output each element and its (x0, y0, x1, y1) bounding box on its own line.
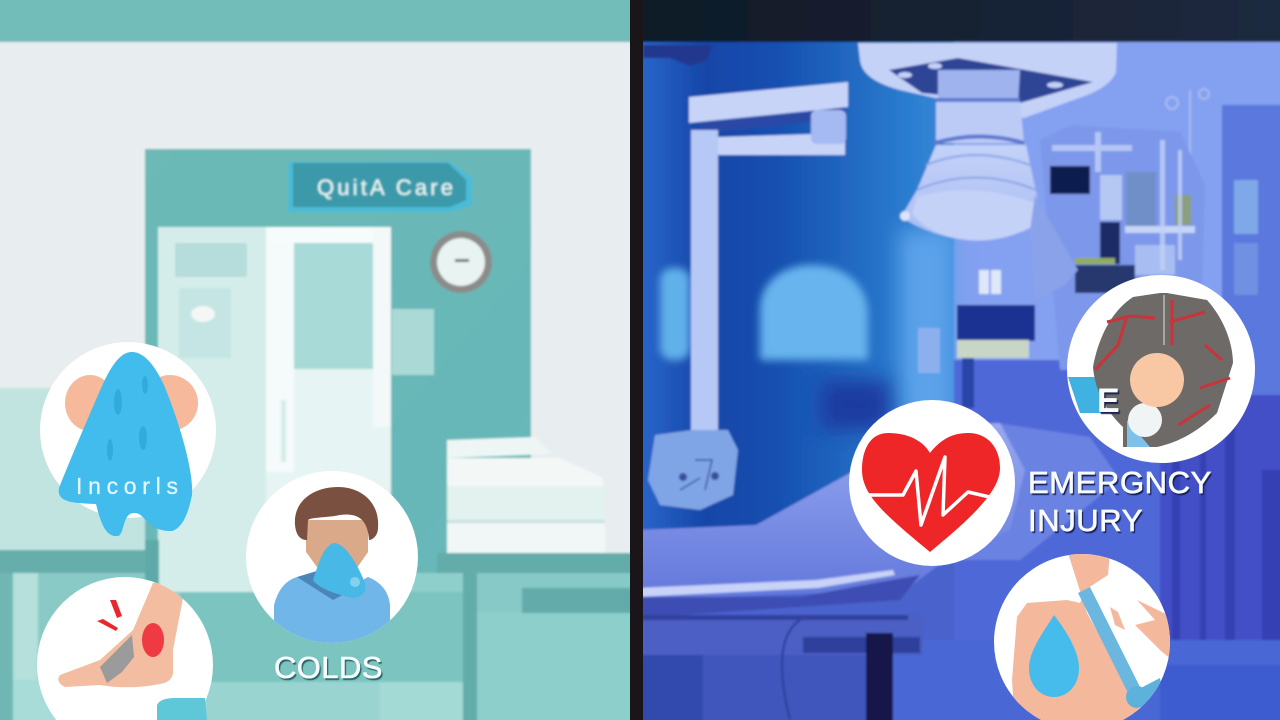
icon: nose with tissue: Incorls (76, 473, 178, 499)
panel: emergency room scene (636, 0, 1280, 720)
right desk (437, 553, 640, 720)
label: EMERGENCY INJURY: EMERGNCY (1028, 465, 1212, 500)
blurred window glow left (660, 268, 690, 360)
bed-mounted device (648, 430, 738, 510)
lower room behind the bed (636, 540, 954, 720)
clinic wall (145, 149, 531, 599)
hospital bed (636, 423, 1120, 720)
bedside shelf (957, 305, 1035, 408)
top band (0, 0, 640, 42)
floor (0, 573, 640, 720)
label: EMERGENCY INJURY: INJURY (1028, 503, 1143, 538)
articulating arm (689, 82, 848, 434)
top band (636, 0, 1280, 42)
panel divider (630, 0, 643, 720)
monitoring equipment (1040, 125, 1205, 370)
icon: chest with tube and drop (994, 553, 1172, 720)
icon: injured foot (37, 577, 213, 720)
door: left leaf (158, 227, 266, 592)
right wall lower (954, 360, 1280, 720)
icon: brain with veins (1067, 275, 1255, 463)
deep blue back wall (636, 42, 954, 542)
light wall bay (900, 230, 954, 440)
wall clock (430, 231, 492, 293)
label: COLDS: COLDS (274, 650, 383, 685)
ceiling surgical lamp (858, 43, 1117, 300)
sign: Quick Care: QuitA Care (317, 175, 453, 200)
sign: Quick Care (288, 162, 472, 212)
label: EMERGENCY INJURY (1028, 465, 1212, 538)
curtain stripes (1172, 380, 1280, 670)
icon: nose with tissue (40, 342, 216, 536)
wall cabinet (1222, 105, 1280, 395)
label: brain badge letter: E (1097, 382, 1120, 420)
panel: quick care clinic scene (0, 0, 640, 720)
small wall frames (979, 270, 1001, 294)
dark blurred block (820, 380, 890, 430)
dark ceiling fixture (643, 45, 712, 66)
icon: person with nasal mask (246, 471, 418, 650)
left lower wall (0, 388, 145, 553)
wall switch panel (918, 328, 940, 373)
icon: heart with ECG line (849, 400, 1015, 566)
blurred window glow centre (760, 265, 868, 360)
wall panel (392, 309, 434, 375)
stacked white supplies on desk (447, 437, 605, 553)
floor (893, 640, 1280, 720)
door: right leaf with window (266, 227, 391, 592)
IV pole (1166, 89, 1209, 300)
left desk (0, 540, 159, 720)
